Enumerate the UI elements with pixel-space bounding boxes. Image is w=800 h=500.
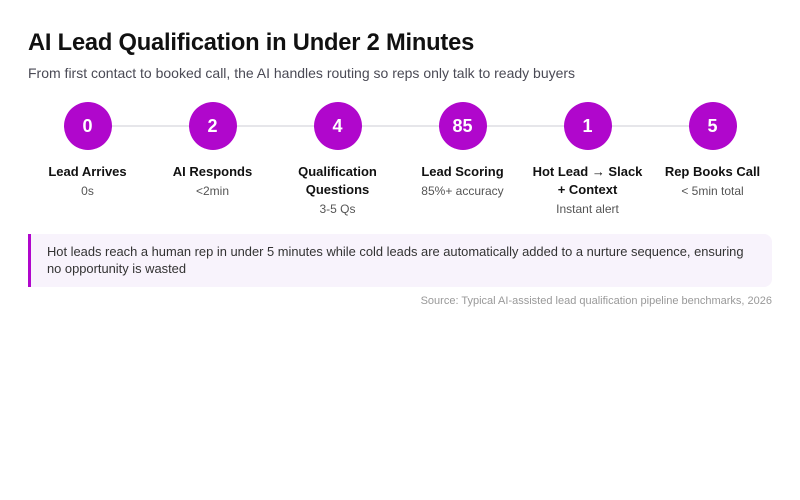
step: Lead Arrives: 0 [82, 116, 92, 136]
step: Hot Lead to Slack: 1 [582, 116, 592, 136]
subtitle: From first contact to booked call, the AI handles routing so reps only talk to ready buyers [28, 65, 575, 81]
callout: no opportunity is wasted [47, 261, 186, 276]
step: AI Responds: <2min [196, 184, 229, 198]
callout: Hot leads reach a human rep in under 5 minutes while cold leads are automatically added to a nurture sequence, ensuring [47, 244, 744, 259]
step: Qualification Questions [298, 102, 377, 216]
step: AI Responds [173, 102, 252, 198]
source note: Source: Typical AI-assisted lead qualification pipeline benchmarks, 2026 [421, 295, 772, 307]
step: Hot Lead to Slack: Instant alert [556, 202, 619, 216]
step: Lead Scoring: 85%+ accuracy [421, 184, 504, 198]
step: Hot Lead to Slack: + Context [558, 182, 617, 197]
step: Rep Books Call: 5 [707, 116, 718, 136]
step: AI Responds: AI Responds [173, 164, 252, 179]
step: Lead Scoring: Lead Scoring [421, 164, 504, 179]
callout [28, 234, 772, 287]
step: Rep Books Call: < 5min total [681, 184, 744, 198]
title: AI Lead Qualification in Under 2 Minutes [28, 30, 474, 56]
step: Hot Lead to Slack [533, 102, 642, 216]
step: Rep Books Call: Rep Books Call [665, 164, 760, 179]
step: Lead Scoring: 85 [452, 116, 473, 136]
step: AI Responds: 2 [207, 116, 218, 136]
step: Qualification Questions: 4 [332, 116, 342, 136]
step: Hot Lead to Slack: Hot Lead → Slack [533, 164, 642, 179]
step: Lead Scoring [421, 102, 504, 198]
step: Qualification Questions: Qualification [298, 164, 377, 179]
step: Lead Arrives [48, 102, 127, 198]
step: Rep Books Call [665, 102, 760, 198]
timeline connector line [87, 125, 713, 127]
step: Lead Arrives: 0s [81, 184, 94, 198]
step: Lead Arrives: Lead Arrives [48, 164, 127, 179]
step: Qualification Questions: Questions [306, 182, 369, 197]
step: Qualification Questions: 3-5 Qs [319, 202, 356, 216]
